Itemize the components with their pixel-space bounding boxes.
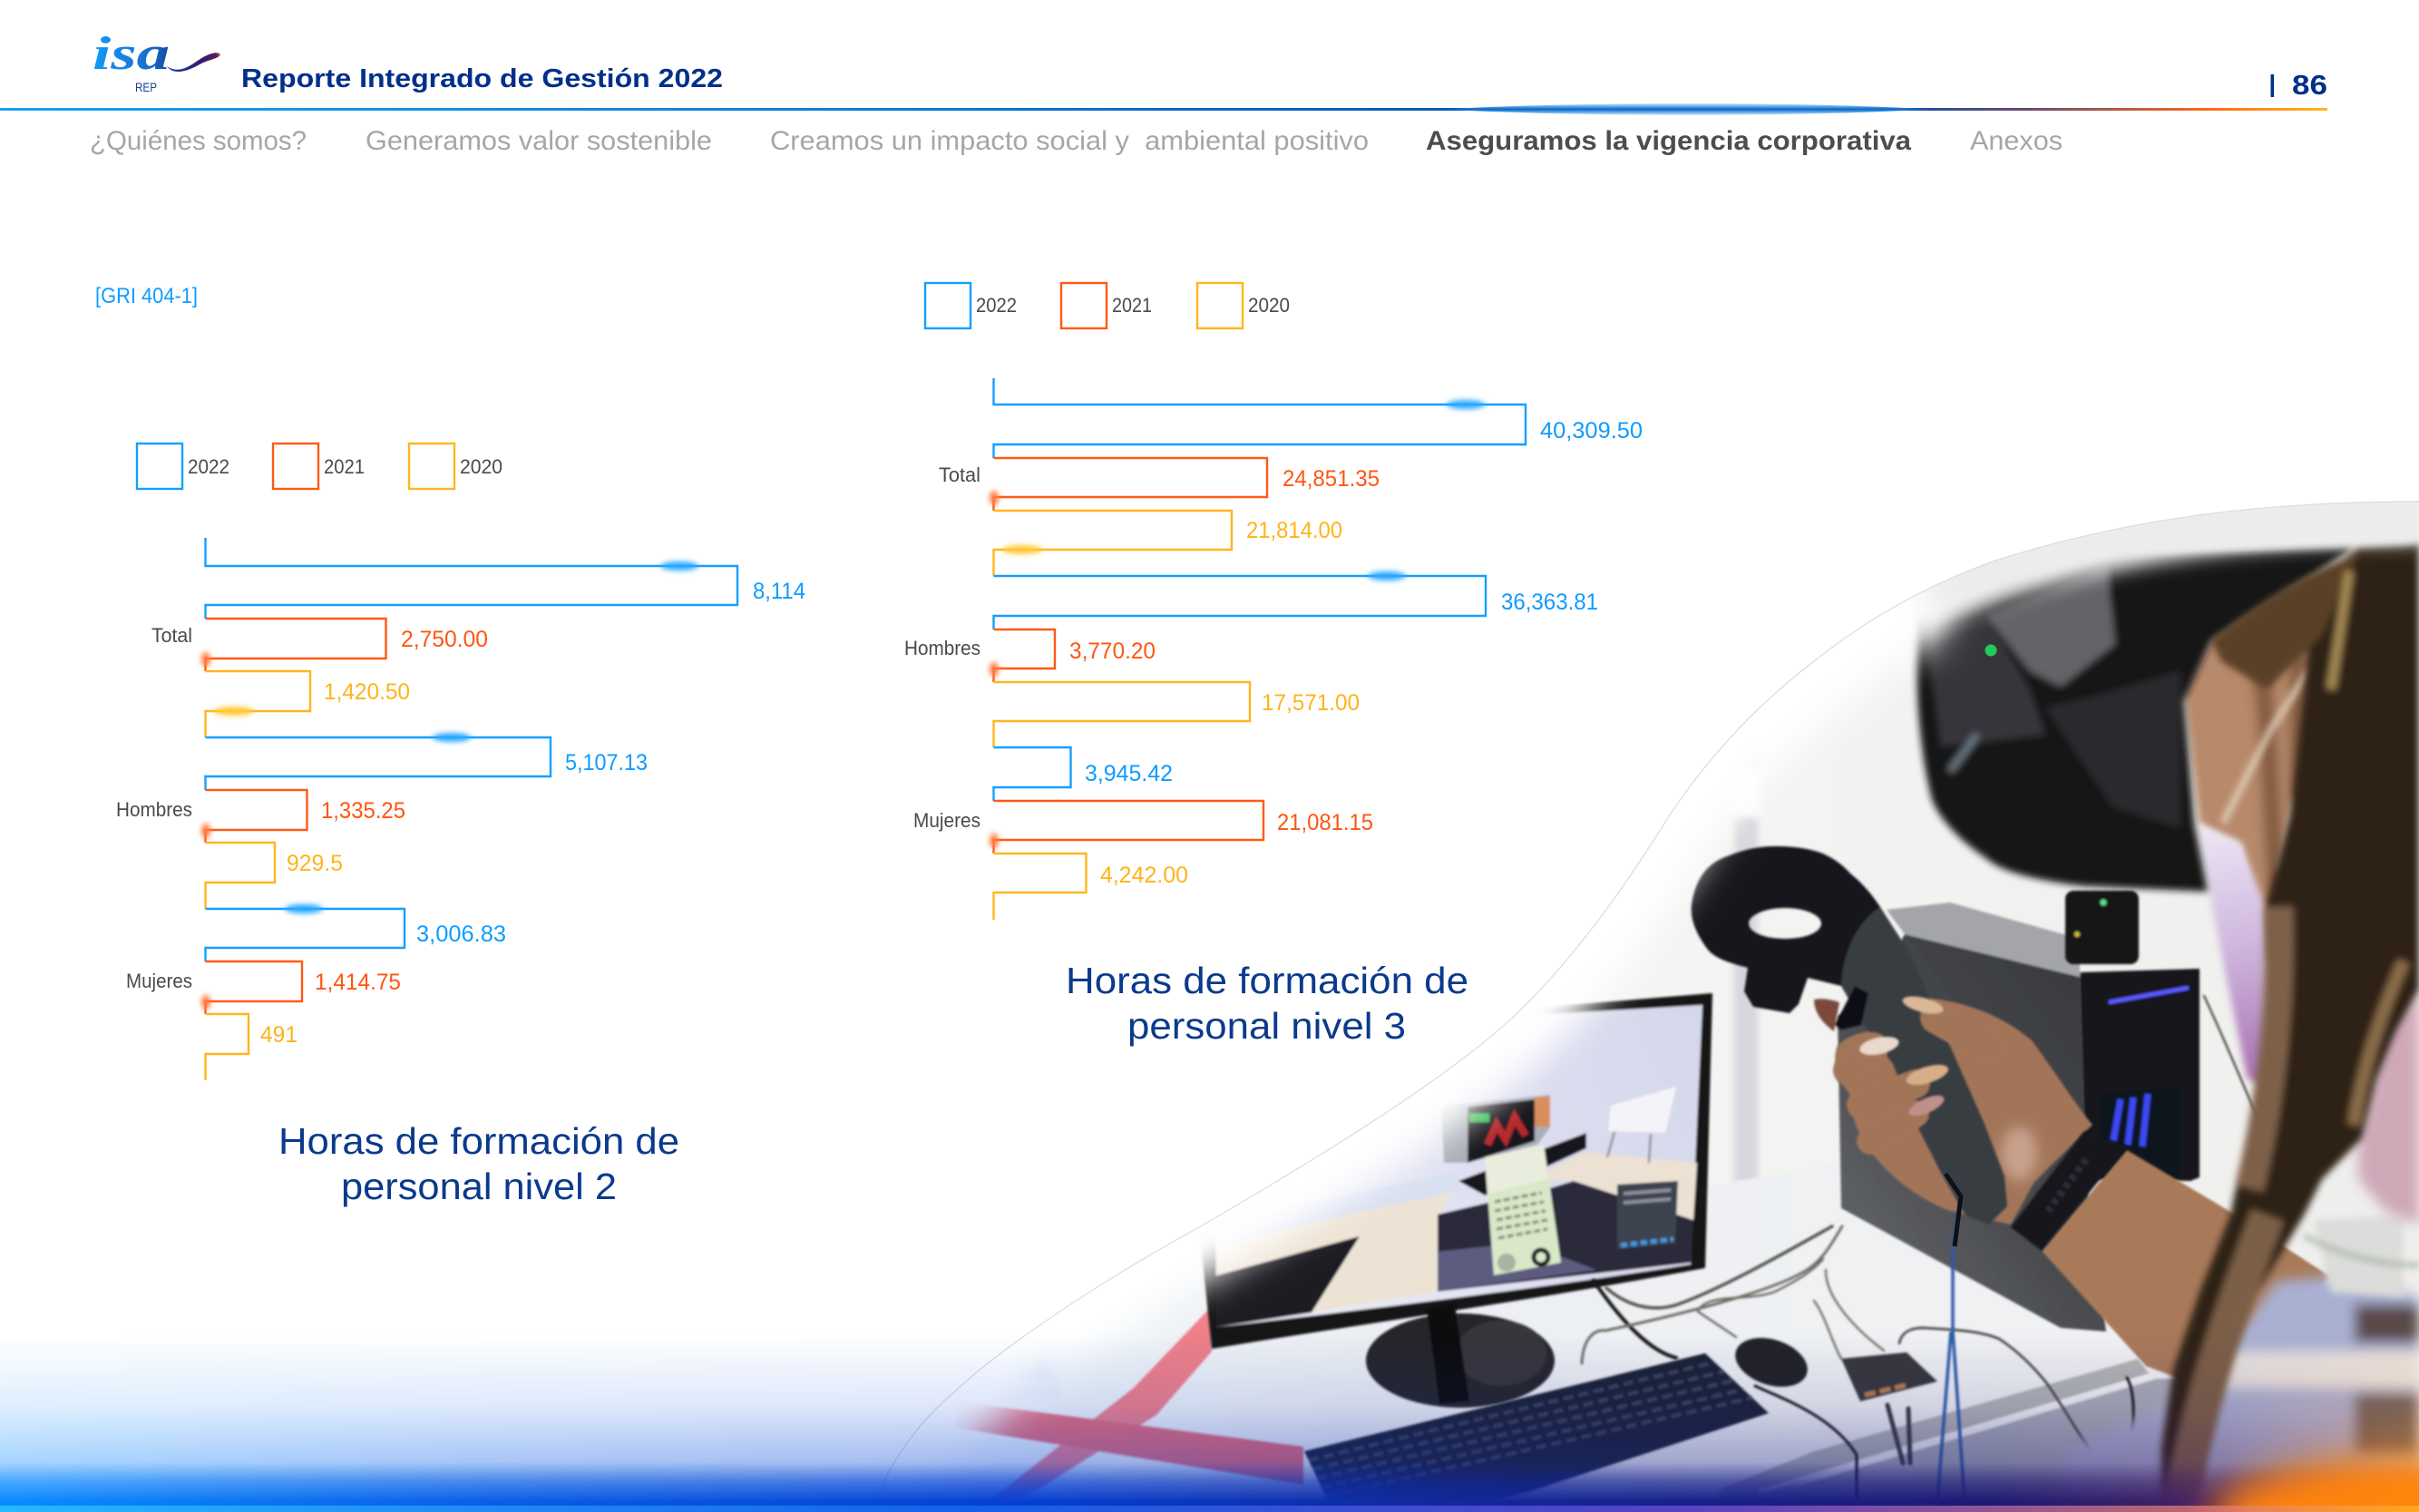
tracking sensor [2065,891,2139,964]
fingers and nails [1848,993,1991,1141]
mask straps [2223,671,2308,871]
tower side panel [1838,934,2106,1332]
headset status LED [1985,644,1997,657]
legend: nivel 3 chart: 2021 [1112,294,1152,317]
row: Hombres: Hombres [904,637,980,659]
header: logo: REP [135,80,157,94]
keyboard [1304,1353,1769,1512]
legend: nivel 3 chart [925,283,1290,328]
desk item behind shoulder [2304,1215,2419,1297]
monitor frame [1199,993,1712,1349]
header: logo [93,28,220,94]
row: Hombres: 36,363.81 [1501,590,1598,615]
legend: nivel 2 chart [137,444,502,489]
wall pole [1732,817,1760,1181]
row: Hombres: 17,571.00 [1262,690,1360,716]
photo: VR training scene [871,490,2419,1512]
header: gradient rule with highlight lens [0,103,2327,115]
red floor tape cross [956,1306,1303,1512]
navigation menu [90,126,2063,156]
row: Total: 40,309.50 [1540,418,1643,444]
black wedge [1216,1236,1360,1327]
smart watch [2011,1131,2127,1251]
row: Mujeres [126,904,506,1080]
controller handle [1841,907,2007,1224]
header: report title: Reporte Integrado de Gestión 2022 [241,64,723,93]
row: Mujeres: 1,414.75 [315,970,401,995]
bottom gradient band [0,1333,2419,1512]
legend: nivel 3 chart: 2020 [1248,294,1290,317]
row: Hombres: 929.5 [287,851,343,876]
row: Mujeres: 3,006.83 [416,922,506,947]
navigation menu: Aseguramos la vigencia corporativa [1426,126,1911,156]
USB hub [1841,1352,1937,1401]
row: Total: Total [151,624,192,647]
navigation menu: ¿Quiénes somos? [90,126,307,156]
desk surface [1078,1177,2175,1493]
tower LED strip [2109,988,2189,1002]
mouse [1733,1336,1809,1389]
row: Hombres: 5,107.13 [565,750,648,776]
floating dark menu [1617,1181,1678,1249]
controller ring [1692,846,1880,1022]
chart title: nivel 3: Horas de formación de [1066,960,1468,1001]
chart title: nivel 3: personal nivel 3 [1127,1005,1406,1047]
monitor stand [1366,1304,1555,1408]
right floor [1533,1152,1697,1220]
VR headset [1917,547,2355,892]
swoosh outline [880,502,2419,1490]
row: Mujeres: 3,945.42 [1085,761,1173,786]
header: page number [2271,69,2327,101]
row: Mujeres: Mujeres [913,809,980,832]
hand palm [1835,998,2092,1224]
row: Mujeres: 491 [260,1022,297,1048]
PC tower [1838,902,2200,1332]
face [2184,580,2322,961]
cable connector [1946,1174,1961,1246]
navigation menu: Creamos un impacto social y ambiental positivo [770,126,1369,156]
monitor [1199,993,1712,1349]
row: Total: 1,420.50 [324,679,410,705]
GRI reference: [GRI 404-1] [95,284,198,308]
row: Total: 21,814.00 [1246,518,1342,543]
chart title: nivel 3 [1066,960,1468,1047]
chart title: nivel 2 [278,1120,679,1207]
virtual room bench [1286,1176,1457,1228]
virtual wall panel [1441,1095,1550,1163]
row: Total: 24,851.35 [1283,466,1380,492]
whiteboard [1607,1087,1676,1163]
hair [2161,544,2419,1512]
row: Mujeres: Mujeres [126,970,192,992]
forearm [2042,1150,2331,1388]
tower top vent [1887,902,2080,977]
hand sanitizer bottle [1029,1362,1056,1393]
top edge haze [1905,502,2419,603]
row: Total [151,538,805,737]
header: logo: isa [93,28,170,80]
chart title: nivel 2: Horas de formación de [278,1120,679,1162]
row: Mujeres: 4,242.00 [1100,863,1188,888]
tower front [2080,969,2200,1181]
tower fan glow [2113,1094,2148,1146]
chart: horas de formación nivel 2 [116,538,805,1080]
controller cable [1937,1174,1965,1501]
inner white fade along swoosh [880,590,1923,1490]
legend: nivel 2 chart: 2022 [188,455,229,478]
legend: nivel 2 chart: 2021 [324,455,365,478]
dark floor [1438,1181,1693,1292]
counter strip [1458,1133,1586,1195]
row: Mujeres: 21,081.15 [1277,810,1373,835]
cables [1582,996,2261,1501]
row: Total: Total [939,463,980,486]
row: Hombres: 3,770.20 [1069,639,1156,664]
chart: horas de formación nivel 3 [904,378,1643,920]
row: Total: 2,750.00 [401,627,488,652]
controller trigger [1835,986,1868,1029]
navigation menu: Anexos [1970,126,2063,156]
row: Total [939,378,1643,576]
monitor screen [1216,1005,1702,1327]
legend: nivel 3 chart: 2022 [976,294,1017,317]
pink mask far side [2358,989,2419,1224]
row: Total: 8,114 [753,579,805,604]
row: Hombres: 1,335.25 [321,798,405,824]
row: Mujeres [913,747,1373,920]
row: Hombres [904,571,1598,747]
tower fan window [2100,1087,2180,1177]
row: Hombres: Hombres [116,798,192,821]
tablet [1485,1145,1561,1275]
VR controller [1692,846,2007,1224]
wrist highlight [2001,1127,2037,1181]
virtual room floor [1215,1192,1452,1313]
legend: nivel 2 chart: 2020 [460,455,502,478]
face shadow streaks [2258,635,2300,943]
face mask [2196,824,2266,1084]
chart title: nivel 2: personal nivel 2 [341,1166,617,1207]
row: Hombres [116,733,648,909]
photo background wall [1609,502,2419,1297]
header: page number: 86 [2292,69,2327,101]
plaid shirt [2064,1274,2419,1512]
navigation menu: Generamos valor sostenible [366,126,712,156]
